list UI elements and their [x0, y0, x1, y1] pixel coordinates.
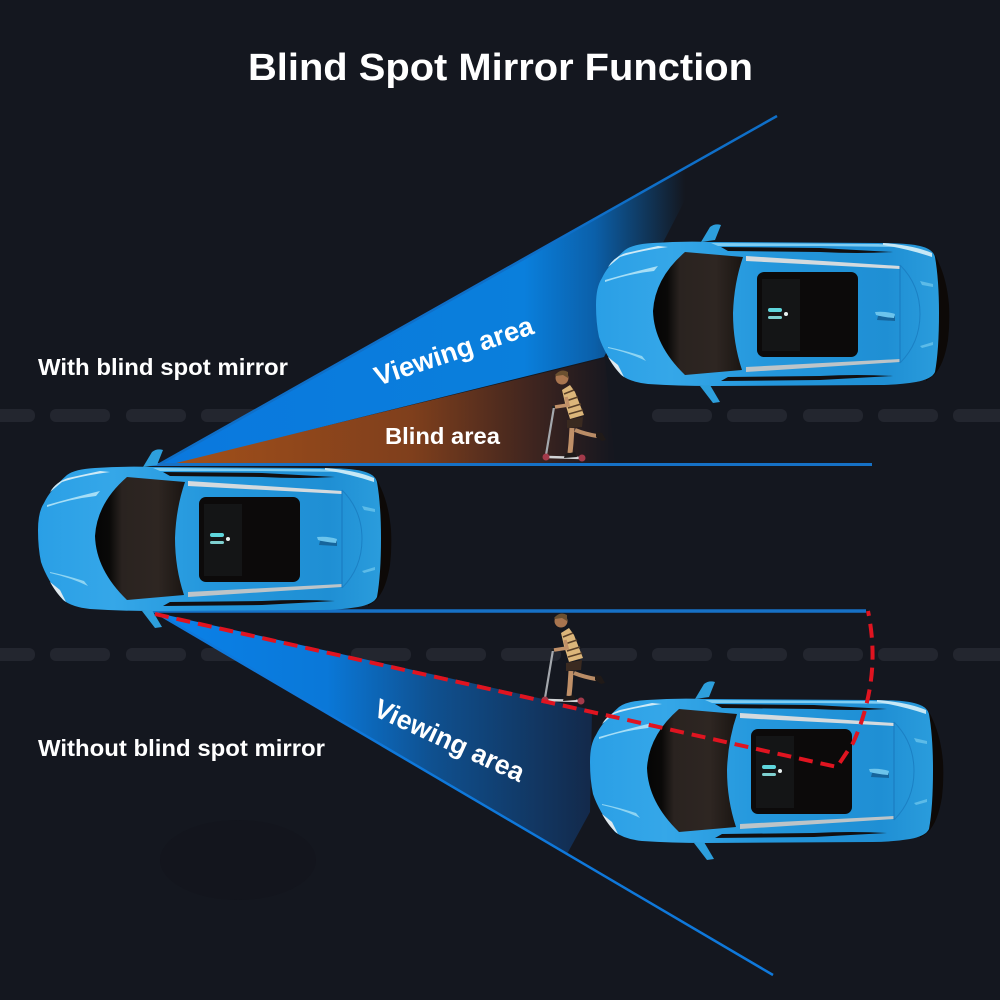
- label: blind area: Blind area: [385, 423, 501, 449]
- road lane markings: lower: [0, 648, 1000, 661]
- viewing area wedge: with mirror: [156, 116, 777, 466]
- label: without blind spot mirror: Without blind spot mirror: [38, 735, 325, 761]
- label: with blind spot mirror: With blind spot mirror: [38, 354, 288, 380]
- upper beam edge line: [158, 116, 777, 465]
- faint smudge: [160, 820, 316, 900]
- title: Blind Spot Mirror Function: [248, 47, 753, 89]
- boy on scooter: without mirror: [542, 614, 605, 704]
- boy on scooter: blind area: [542, 371, 606, 462]
- label: viewing area upper: Viewing area: [370, 310, 538, 392]
- road lane markings: upper: [0, 409, 1000, 422]
- viewing area wedge: without mirror: [153, 612, 592, 854]
- car: bottom right without mirror: [590, 681, 943, 860]
- car: driver vehicle: [38, 449, 391, 628]
- label: viewing area lower: Viewing area: [370, 693, 530, 788]
- red dashed blind zone boundary: [155, 611, 873, 767]
- blind area bottom line: [150, 463, 872, 466]
- car lower side line: [150, 609, 866, 613]
- car: top right with mirror: [596, 224, 949, 403]
- blind area wedge: [165, 358, 615, 465]
- lower beam edge line: [155, 612, 773, 975]
